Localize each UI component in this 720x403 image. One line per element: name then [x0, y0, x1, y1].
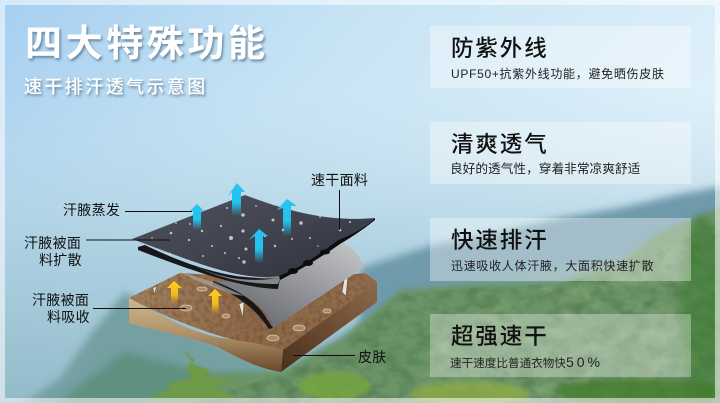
title: 四大特殊功能: [25, 23, 269, 64]
water droplets: [151, 205, 351, 264]
blue evaporation arrows: [189, 183, 297, 263]
label: skin: 皮肤: [358, 349, 387, 365]
gray inner fabric: [180, 242, 363, 329]
skin layer: [129, 273, 377, 372]
label: fabric spreads sweat: 汗腋被面: [24, 235, 81, 251]
label: quick-dry fabric: 速干面料: [311, 172, 368, 188]
panel: super quick dry: 超强速干: [451, 324, 549, 349]
panel: UV protection: [430, 26, 691, 88]
label: sweat evaporation: [63, 202, 192, 218]
hair follicles: [153, 276, 348, 318]
label: fabric absorbs sweat: 料吸收: [47, 309, 90, 325]
panel: super quick dry: [430, 314, 691, 377]
panel: cool and breathable: [430, 122, 691, 184]
label: skin: [293, 349, 387, 365]
panel: cool and breathable: 良好的透气性，穿着非常凉爽舒适: [450, 161, 641, 176]
label: fabric spreads sweat: 料扩散: [39, 252, 82, 268]
panel: fast sweat wicking: 快速排汗: [451, 228, 549, 253]
label: fabric absorbs sweat: 汗腋被面: [32, 292, 89, 308]
label: fabric absorbs sweat: [32, 292, 186, 325]
black lower edge of top fabric: [138, 245, 280, 289]
foreground tree: [150, 349, 236, 398]
panel: UV protection: 防紫外线: [451, 36, 549, 61]
panel: fast sweat wicking: 迅速吸收人体汗腋，大面积快速扩散: [451, 258, 654, 273]
layered fabric diagram: [129, 183, 377, 372]
panel: super quick dry: 速干速度比普通衣物快50%: [450, 354, 603, 370]
label: fabric spreads sweat: [24, 235, 170, 268]
top fabric layer: [132, 195, 375, 280]
forest slopes: [130, 205, 720, 403]
label: sweat evaporation: 汗腋蒸发: [63, 202, 120, 218]
panel: fast sweat wicking: [430, 218, 691, 281]
panel: UV protection: UPF50+抗紫外线功能，避免晒伤皮肤: [451, 66, 665, 81]
panel: cool and breathable: 清爽透气: [451, 132, 549, 157]
subtitle: 速干排汗透气示意图: [24, 77, 208, 97]
yellow sweat arrows: [167, 281, 222, 315]
label: quick-dry fabric: [311, 172, 368, 230]
